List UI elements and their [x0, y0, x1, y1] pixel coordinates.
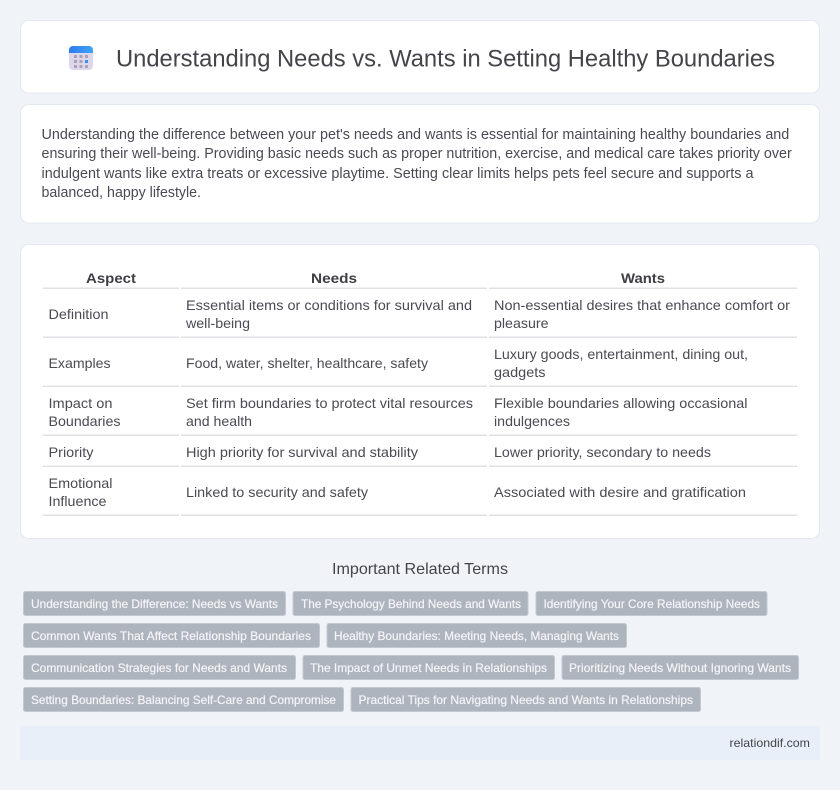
- footer source: relationdif.com: [730, 736, 810, 750]
- row: definition: pleasure: [494, 315, 549, 331]
- table header: Aspect: [86, 270, 136, 286]
- tag: [351, 688, 700, 712]
- text block: introduction: balanced, happy lifestyle.: [42, 185, 201, 201]
- table header: Wants: [621, 270, 665, 286]
- row: emotional influence: Linked to security and safety: [186, 484, 368, 500]
- tag: [293, 592, 528, 616]
- tag: [303, 656, 554, 680]
- tag: [327, 624, 626, 648]
- row: priority: High priority for survival and stability: [186, 444, 418, 460]
- text block: introduction: ensuring their well-being. Providing basic needs such as proper nutrition, exercise, and medical care takes priority over: [42, 146, 792, 162]
- tag: Practical Tips for Navigating Needs and Wants in Relationships: [358, 693, 693, 707]
- row: definition: [48, 297, 790, 331]
- row: emotional influence: Influence: [48, 493, 107, 509]
- related term tags: [24, 592, 798, 712]
- title: Understanding Needs vs. Wants in Setting Healthy Boundaries: [116, 46, 775, 72]
- row: emotional influence: Emotional: [48, 475, 112, 491]
- tag: Understanding the Difference: Needs vs Wants: [31, 597, 278, 611]
- tag: [24, 592, 286, 616]
- row: priority: Priority: [48, 444, 94, 460]
- footer: [20, 726, 820, 760]
- row: impact on boundaries: Set firm boundaries to protect vital resources: [186, 395, 473, 411]
- table header: Needs: [311, 270, 357, 286]
- row: definition: Definition: [48, 306, 108, 322]
- panel: comparison table: [20, 244, 820, 538]
- panel: header: [20, 20, 820, 93]
- tag: Prioritizing Needs Without Ignoring Wants: [569, 661, 791, 675]
- tag: The Impact of Unmet Needs in Relationships: [310, 661, 547, 675]
- tag: [24, 624, 320, 648]
- row: impact on boundaries: Boundaries: [48, 413, 120, 429]
- text block: introduction: [42, 127, 792, 201]
- panel: introduction: [20, 104, 820, 223]
- tag: Healthy Boundaries: Meeting Needs, Managing Wants: [334, 629, 619, 643]
- heading: important related terms: Important Related Terms: [332, 561, 508, 578]
- tag: Identifying Your Core Relationship Needs: [544, 597, 760, 611]
- row: priority: [48, 444, 711, 460]
- row: definition: well-being: [185, 315, 250, 331]
- tag: The Psychology Behind Needs and Wants: [301, 597, 521, 611]
- tag: Communication Strategies for Needs and Wants: [31, 661, 287, 675]
- row: examples: Examples: [48, 355, 110, 371]
- row: examples: [48, 346, 748, 380]
- row: emotional influence: [48, 475, 746, 509]
- row: impact on boundaries: Flexible boundaries allowing occasional: [494, 395, 748, 411]
- tag: [24, 688, 344, 712]
- row: emotional influence: Associated with desire and gratification: [494, 484, 746, 500]
- row: examples: gadgets: [494, 364, 546, 380]
- row: impact on boundaries: [48, 395, 748, 429]
- icon: calendar: [69, 46, 93, 70]
- text block: introduction: Understanding the difference between your pet's needs and wants is essential for maintaining healthy boundaries and: [42, 127, 789, 143]
- row: definition: Non-essential desires that enhance comfort or: [494, 297, 790, 313]
- row: examples: Luxury goods, entertainment, dining out,: [494, 346, 748, 362]
- tag: [24, 656, 296, 680]
- row: impact on boundaries: indulgences: [494, 413, 570, 429]
- tag: [536, 592, 767, 616]
- row: examples: Food, water, shelter, healthcare, safety: [186, 355, 428, 371]
- row: priority: Lower priority, secondary to needs: [494, 444, 711, 460]
- tag: Common Wants That Affect Relationship Boundaries: [31, 629, 311, 643]
- row: impact on boundaries: and health: [186, 413, 252, 429]
- row: definition: Essential items or conditions for survival and: [186, 297, 472, 313]
- tag: [562, 656, 798, 680]
- table header: [86, 270, 665, 286]
- text block: introduction: indulgent wants like extra treats or excessive playtime. Setting clear limits helps pets feel secure and supports a: [42, 166, 754, 182]
- tag: Setting Boundaries: Balancing Self-Care and Compromise: [31, 693, 336, 707]
- row: impact on boundaries: Impact on: [48, 395, 112, 411]
